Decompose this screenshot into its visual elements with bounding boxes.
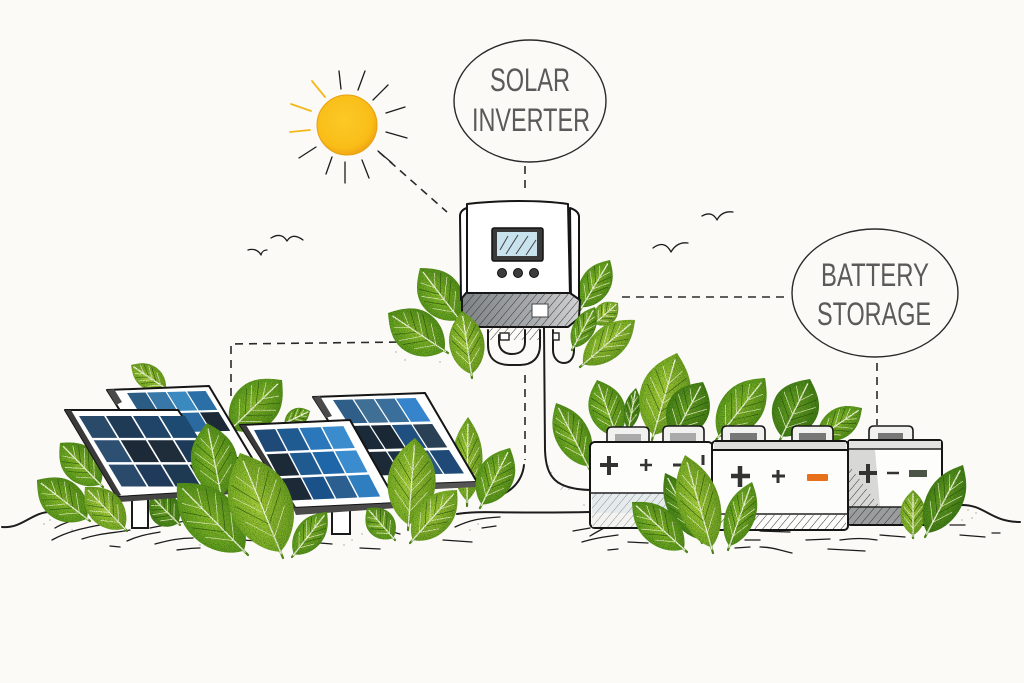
solar inverter unit	[460, 201, 580, 327]
leaves in front of inverter	[445, 302, 645, 381]
solar panel stands	[132, 496, 350, 534]
battery storage label: BATTERY	[821, 257, 929, 293]
solar panel: front left	[65, 410, 232, 502]
battery: left	[590, 426, 713, 528]
solar panel: back right	[313, 393, 477, 492]
sun	[290, 71, 407, 183]
solar inverter label: INVERTER	[472, 102, 590, 138]
battery storage bubble	[792, 229, 958, 357]
solar panel: back left	[107, 386, 252, 458]
battery: right	[848, 426, 942, 525]
inverter buttons	[498, 268, 538, 278]
sun disc	[317, 95, 377, 155]
inverter lower band	[462, 293, 580, 327]
leaves behind batteries	[541, 346, 870, 478]
inverter body	[467, 201, 570, 296]
solar inverter label: SOLAR	[490, 62, 570, 98]
battery: middle	[712, 426, 848, 530]
inverter side flanges	[460, 208, 579, 300]
leaves behind inverter	[376, 252, 625, 371]
inverter port label	[532, 304, 548, 317]
inverter display	[492, 228, 543, 261]
battery storage label: STORAGE	[817, 296, 931, 332]
sun rays	[290, 71, 407, 183]
birds	[248, 212, 733, 255]
solar inverter bubble	[454, 40, 606, 162]
inverter cable loops	[488, 328, 574, 365]
dashed connector lines	[231, 152, 877, 460]
leaves in front of batteries	[620, 449, 979, 565]
ground speckle	[44, 332, 976, 548]
ground	[2, 332, 1020, 553]
solar panel: front middle	[240, 420, 397, 515]
cables from inverter	[493, 328, 590, 497]
left leaves behind panels	[47, 355, 483, 538]
terminal	[869, 426, 913, 441]
left leaves in front of panels	[25, 419, 526, 573]
